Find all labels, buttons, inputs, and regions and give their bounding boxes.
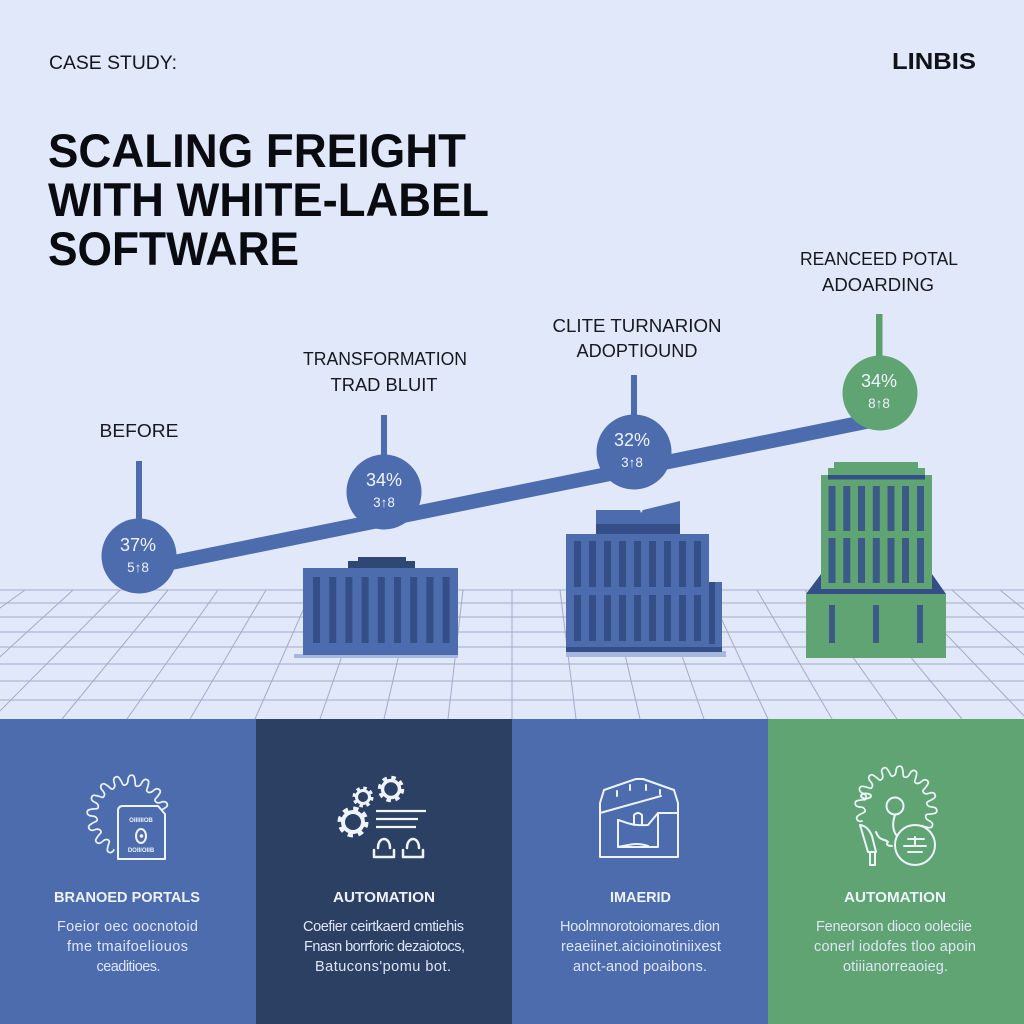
building: before transformation bbox=[294, 557, 458, 658]
milestone: enhanced portal: 8↑8 bbox=[868, 396, 890, 411]
heading: automation: AUTOMATION bbox=[844, 890, 946, 906]
description: imaerid: Hoolmnorotoiomares.dion bbox=[560, 919, 720, 935]
description: imaerid bbox=[560, 919, 721, 975]
milestone: transformation: 3↑8 bbox=[373, 495, 395, 510]
title: SOFTWARE bbox=[48, 222, 299, 275]
milestone: before: BEFORE bbox=[100, 421, 178, 441]
title: WITH WHITE-LABEL bbox=[48, 173, 489, 226]
panel: automation green bbox=[768, 719, 1024, 1024]
heading: automation: AUTOMATION bbox=[333, 890, 435, 906]
panel: imaerid bbox=[512, 719, 768, 1024]
icon: gear and portal document: OIIIIIIOB bbox=[129, 818, 154, 824]
milestone: before: 37% bbox=[120, 535, 156, 555]
milestone: enhanced portal bbox=[800, 249, 958, 430]
milestone: transformation: 34% bbox=[366, 470, 402, 490]
description: branded portals: Foeior oec oocnotoid bbox=[57, 919, 198, 935]
panel: branded portals bbox=[0, 719, 256, 1024]
milestone: enhanced portal: REANCEED POTAL bbox=[800, 249, 958, 269]
icon: gear and portal document: DOIIIOIIB bbox=[128, 848, 155, 854]
milestone: before: 5↑8 bbox=[127, 560, 149, 575]
icon: gears, lines and brackets bbox=[340, 778, 426, 857]
milestone: adoption: 3↑8 bbox=[621, 455, 643, 470]
heading: imaerid: IMAERID bbox=[610, 890, 671, 906]
brand name: LINBIS bbox=[892, 48, 976, 74]
icon: gear, bulb and dial bbox=[853, 764, 939, 865]
milestone: enhanced portal: ADOARDING bbox=[822, 275, 934, 295]
building: mid-size tower bbox=[566, 501, 726, 657]
description: automation: Coefier ceirtkaerd cmtiehis bbox=[303, 919, 464, 935]
description: automation: Batucons'pomu bot. bbox=[315, 959, 451, 975]
milestone: adoption bbox=[552, 316, 722, 490]
heading: branded portals: BRANOED PORTALS bbox=[54, 890, 200, 906]
description: automation bbox=[814, 919, 976, 975]
building: green tower bbox=[806, 462, 946, 658]
title: SCALING FREIGHT bbox=[48, 124, 466, 177]
description: automation: otiiianorreaoieg. bbox=[843, 959, 948, 975]
description: branded portals: ceaditioes. bbox=[96, 959, 160, 975]
eyebrow: case study: CASE STUDY: bbox=[49, 52, 177, 74]
description: automation: Feneorson dioco ooleciie bbox=[816, 919, 972, 935]
title bbox=[48, 124, 489, 275]
milestone: adoption: CLITE TURNARION bbox=[552, 316, 722, 336]
milestone: transformation: TRANSFORMATION bbox=[303, 349, 467, 369]
milestone: adoption: 32% bbox=[614, 430, 650, 450]
milestone: before bbox=[100, 421, 178, 594]
icon: gear and portal document bbox=[85, 773, 171, 859]
description: automation: Fnasn borrforic dezaiotocs, bbox=[304, 939, 465, 955]
perspective floor grid bbox=[0, 590, 1024, 719]
description: imaerid: reaeiinet.aicioinotiniixest bbox=[561, 939, 721, 955]
description: automation bbox=[303, 919, 465, 975]
description: imaerid: anct-anod poaibons. bbox=[573, 959, 707, 975]
icon: warehouse bbox=[600, 779, 678, 857]
milestone: transformation: TRAD BLUIT bbox=[330, 375, 438, 395]
milestone: transformation bbox=[303, 349, 467, 530]
milestone: enhanced portal: 34% bbox=[861, 371, 897, 391]
panel: automation dark bbox=[256, 719, 512, 1024]
milestone: adoption: ADOPTIOUND bbox=[576, 341, 698, 361]
description: branded portals: fme tmaifoeliouos bbox=[67, 939, 188, 955]
description: branded portals bbox=[57, 919, 198, 975]
growth trend line bbox=[139, 419, 880, 569]
description: automation: conerl iodofes tloo apoin bbox=[814, 939, 976, 955]
